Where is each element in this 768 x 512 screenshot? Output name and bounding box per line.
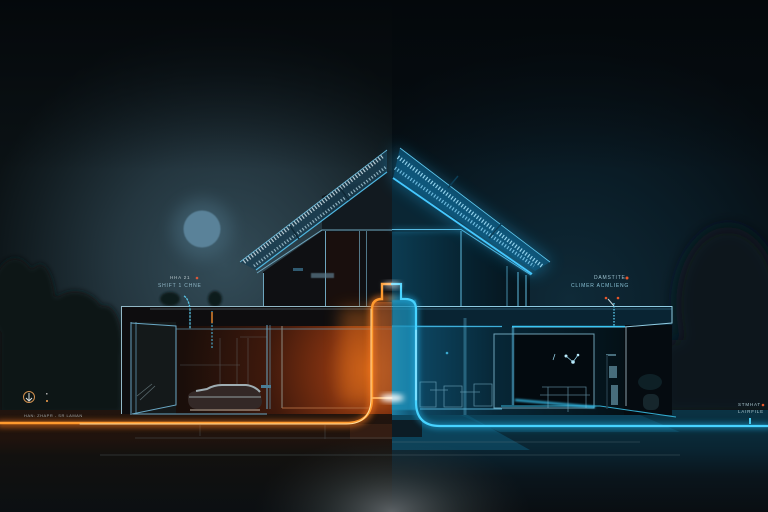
label: lower left with icon [24, 392, 83, 418]
tree silhouettes right [672, 239, 718, 408]
background: right night sky [392, 107, 768, 342]
label: top right [571, 275, 629, 299]
label: top left [158, 276, 201, 287]
shelf unit [606, 354, 618, 409]
label: top left: HHA 21 [170, 275, 190, 280]
furniture: chairs and table [420, 382, 590, 412]
solar panels: left roof [240, 150, 387, 270]
small trees behind the house [160, 291, 222, 307]
car [188, 385, 271, 411]
blue line: glow and core [392, 284, 768, 426]
tree silhouettes left [8, 260, 121, 410]
label: lower right: STMHAT [738, 402, 761, 407]
label: top left: SHIFT 1 CHNE [158, 283, 202, 289]
center junction glow [380, 282, 404, 402]
background: left night sky [0, 72, 392, 410]
house: ground floor left, garage [121, 296, 392, 415]
label: lower right [738, 402, 764, 424]
label: top right: CLIMER ACMLIENG [571, 283, 629, 289]
potted plant [638, 374, 662, 410]
solar panels: right roof [393, 146, 552, 276]
house: ground floor right [392, 299, 676, 417]
label: top right: DAMSTITE [594, 275, 626, 281]
label: lower left with icon: HAN: ZHAPR - SR LAMAN [24, 413, 83, 418]
orange line: glow and core [0, 284, 392, 424]
top vignette [0, 0, 392, 140]
ground [0, 405, 768, 512]
moon [172, 199, 232, 259]
house: upper storey [257, 170, 533, 306]
label: lower right: LAIRFILE [738, 409, 764, 414]
